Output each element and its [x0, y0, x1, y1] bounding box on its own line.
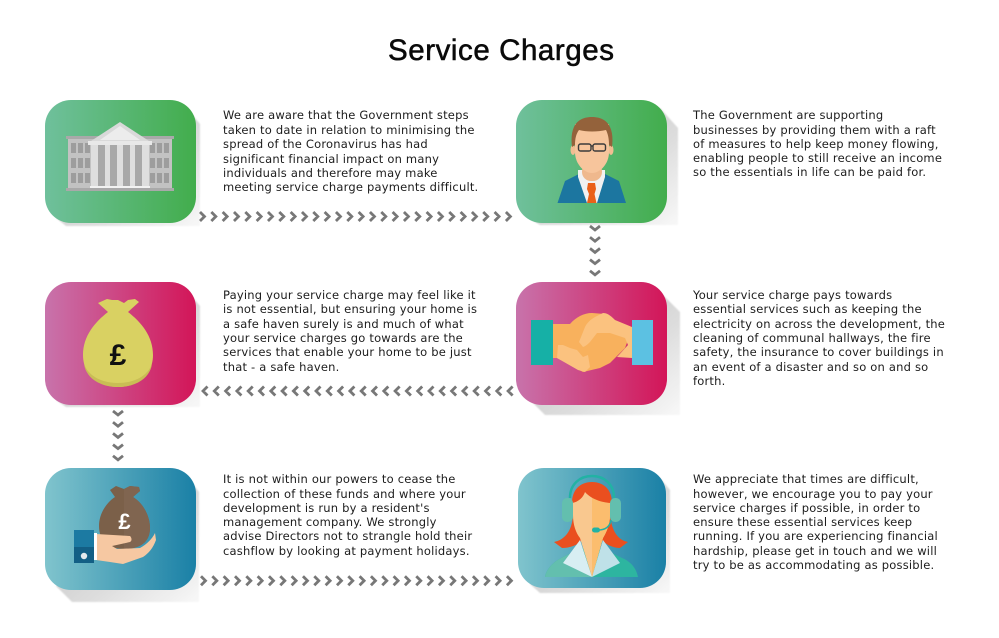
- text: paragraph 5: collection of these funds and where your: [223, 487, 466, 501]
- text: paragraph 4: forth.: [693, 374, 725, 388]
- text: paragraph 6: try to be as accommodating as possible.: [693, 558, 934, 572]
- panel: money bag card: [45, 282, 200, 407]
- text: paragraph 3: services that enable your home to be just: [223, 345, 472, 359]
- text: paragraph 5: It is not within our powers to cease the: [223, 472, 456, 486]
- text: paragraph 3: is not essential, but ensuring your home is: [223, 302, 477, 316]
- text: paragraph 6: ensure these essential services keep: [693, 515, 912, 529]
- icon: government building: [66, 122, 174, 191]
- text: paragraph 1: meeting service charge payments difficult.: [223, 180, 478, 194]
- panel: hand holding money card: [45, 468, 199, 602]
- text: paragraph 1: significant financial impact on many: [223, 152, 439, 166]
- text: paragraph 4: an event of a disaster and so on and so: [693, 360, 928, 374]
- text: paragraph 2: The Government are supporting: [692, 108, 883, 122]
- arrow: building to businessman: [200, 212, 510, 221]
- text: paragraph 4: cleaning of communal hallways, the fire: [693, 331, 931, 345]
- icon: pound sign: £: [110, 339, 127, 372]
- text: paragraph 1: individuals and therefore may make: [223, 166, 438, 180]
- icon: businessman: [558, 117, 626, 203]
- icon: money bag: [83, 299, 153, 387]
- panel: handshake card: [516, 282, 680, 415]
- text: paragraph 3: that - a safe haven.: [223, 360, 340, 374]
- text: paragraph 6: however, we encourage you to pay your: [693, 487, 933, 501]
- text: paragraph 4: Your service charge pays towards: [692, 288, 892, 302]
- arrow: money bag to hand with bag: [113, 411, 123, 460]
- text: paragraph 6: service charges if possible, in order to: [693, 501, 920, 515]
- text: paragraph 3: a safe haven surely is and much of what: [223, 317, 464, 331]
- text: paragraph 3: Paying your service charge may feel like it: [223, 288, 476, 302]
- text: paragraph 6: hardship, please get in touch and we will: [693, 544, 937, 558]
- icon: handshake: [531, 313, 653, 372]
- text: paragraph 5: management company. We strongly: [223, 515, 437, 529]
- text: paragraph 4: essential services such as keeping the: [693, 302, 922, 316]
- text: paragraph 2: so the essentials in life can be paid for.: [693, 165, 926, 179]
- panel: government building card: [45, 100, 200, 226]
- icon: pound sign: £: [118, 509, 131, 534]
- text: paragraph 5: development is run by a resident's: [223, 501, 430, 515]
- text: paragraph 4: safety, the insurance to cover buildings in: [693, 345, 944, 359]
- text: paragraph 4: electricity on across the development, the: [693, 317, 945, 331]
- icon: hand holding money bag: [74, 486, 156, 564]
- text: paragraph 5: cashflow by looking at payment holidays.: [223, 544, 470, 558]
- text: paragraph 2: of measures to help keep money flowing,: [693, 137, 939, 151]
- panel: call agent card: [518, 468, 670, 593]
- text: paragraph 6: We appreciate that times are difficult,: [693, 472, 919, 486]
- text: paragraph 6: running. If you are experiencing financial: [693, 529, 938, 543]
- arrow: businessman to handshake: [590, 226, 600, 275]
- title: Service Charges: [388, 34, 614, 67]
- text: paragraph 3: your service charges go towards are the: [223, 331, 463, 345]
- icon: call agent: [545, 476, 638, 577]
- text: paragraph 1: taken to date in relation to minimising the: [223, 123, 475, 137]
- text: paragraph 5: advise Directors not to strangle hold their: [223, 529, 472, 543]
- text: paragraph 1: We are aware that the Government steps: [223, 108, 469, 122]
- panel: businessman card: [516, 100, 678, 225]
- text: paragraph 2: businesses by providing them with a raft: [693, 123, 936, 137]
- arrow: hand holding money to call agent: [201, 576, 511, 585]
- arrow: handshake to money bag: [203, 386, 513, 396]
- text: paragraph 2: enabling people to still receive an income: [693, 151, 942, 165]
- text: paragraph 1: spread of the Coronavirus has had: [223, 137, 428, 151]
